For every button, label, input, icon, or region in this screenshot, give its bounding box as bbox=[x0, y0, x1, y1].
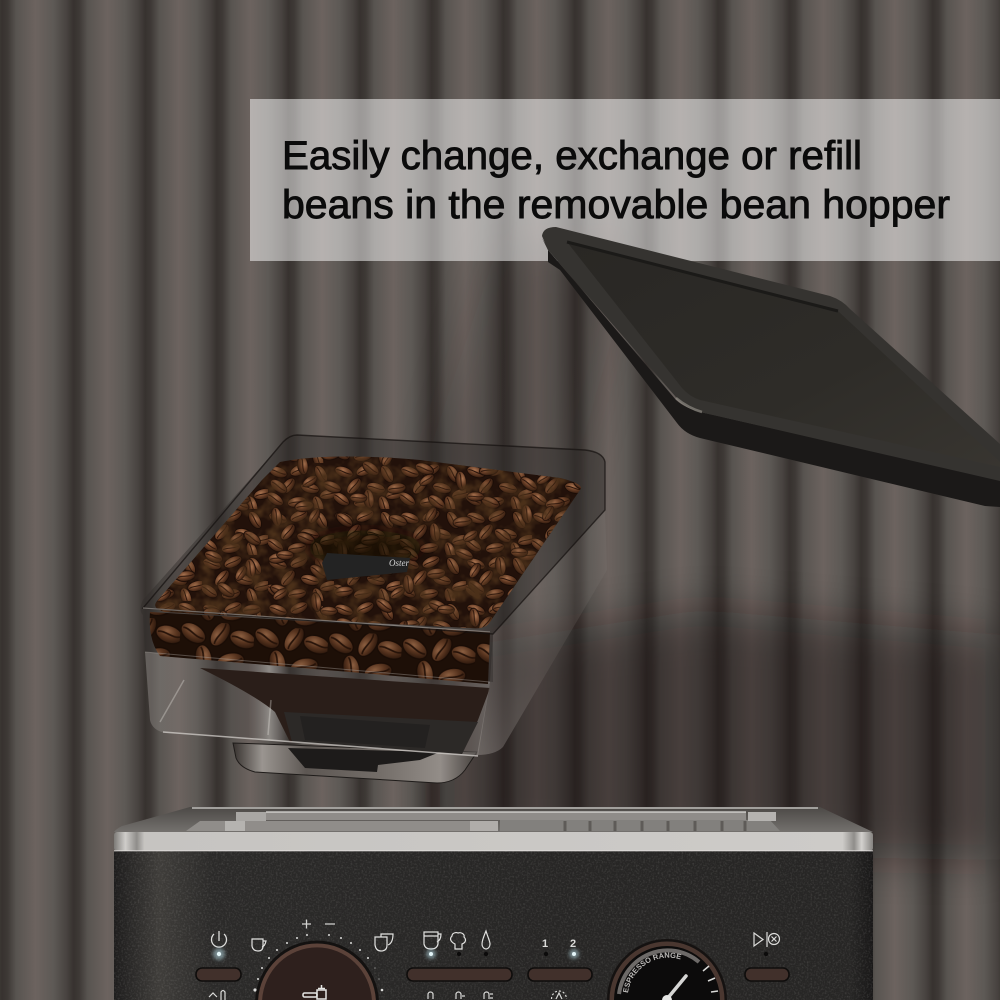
tray rim highlights bbox=[143, 435, 605, 634]
bean hopper bbox=[140, 435, 607, 783]
lid rim bbox=[542, 227, 1000, 481]
size button bbox=[528, 968, 592, 981]
selection dial bbox=[255, 941, 379, 1000]
side clear wall bbox=[477, 510, 607, 755]
stop button bbox=[745, 968, 789, 981]
lid side bbox=[542, 238, 1000, 507]
plus minus bbox=[302, 920, 335, 928]
metal band bbox=[114, 832, 873, 851]
gauge arc bbox=[619, 950, 699, 994]
size LEDs bbox=[544, 949, 579, 959]
size labels: 1 bbox=[542, 938, 548, 950]
power LED bbox=[213, 948, 225, 960]
gauge ticks bbox=[703, 966, 718, 992]
tag on beans: Oster bbox=[389, 558, 409, 568]
dark bowl bbox=[200, 668, 490, 754]
cup icon bbox=[252, 939, 266, 951]
beans top surface bbox=[150, 450, 590, 635]
portafilter icon bbox=[303, 985, 326, 999]
machine body bbox=[114, 851, 873, 1000]
coffee machine bbox=[114, 807, 873, 1000]
lower clear body bbox=[145, 652, 490, 756]
stop LED bbox=[764, 952, 768, 956]
double cup icon bbox=[375, 934, 393, 951]
gauge label: ESPRESSO RANGE bbox=[623, 952, 682, 993]
heading text: Easily change, exchange or refill bbox=[282, 134, 862, 178]
upper tray glass bbox=[140, 435, 605, 682]
foot tab bbox=[288, 748, 440, 772]
dial ticks bbox=[253, 934, 383, 992]
drink LEDs bbox=[426, 949, 488, 959]
play stop icon bbox=[754, 932, 780, 947]
bean well top bbox=[114, 807, 873, 832]
size labels: 2 bbox=[570, 938, 576, 950]
text panel bbox=[250, 99, 1000, 261]
tag on beans bbox=[322, 553, 410, 580]
grind size icon bbox=[209, 990, 225, 1000]
espresso gauge bbox=[607, 939, 727, 1000]
lower icons bbox=[428, 991, 567, 999]
gauge needle bbox=[662, 976, 686, 1000]
hopper lid bbox=[542, 227, 1000, 507]
drink icons bbox=[424, 931, 490, 949]
lid inner face bbox=[567, 242, 1000, 467]
drink button bbox=[407, 968, 512, 981]
beans seen through the front wall bbox=[150, 612, 490, 684]
power button bbox=[196, 968, 241, 981]
heading text: beans in the removable bean hopper bbox=[282, 183, 950, 227]
hopper foot bbox=[233, 743, 477, 783]
control: power icon bbox=[211, 931, 226, 947]
